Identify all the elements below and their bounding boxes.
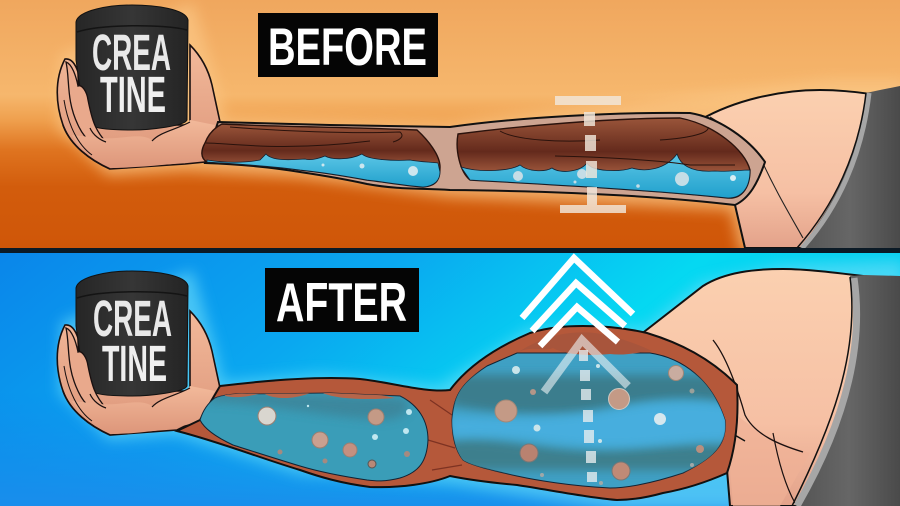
up arrow chevrons bbox=[522, 258, 633, 392]
label: before: BEFORE bbox=[268, 18, 427, 77]
jar: TINE bbox=[100, 66, 166, 123]
before tank top bbox=[797, 86, 900, 248]
before shoulder bbox=[700, 90, 880, 248]
before background bbox=[0, 0, 900, 250]
fingers over jar bbox=[66, 62, 106, 144]
after upper arm muscle bbox=[450, 332, 730, 488]
after hand and jar bbox=[57, 271, 220, 435]
label: after: AFTER bbox=[276, 271, 407, 333]
after arm glow bbox=[63, 265, 900, 506]
jar label: CREA bbox=[93, 290, 172, 347]
jar: TINE bbox=[102, 335, 167, 392]
after shoulder bbox=[640, 269, 880, 506]
panel: before bbox=[0, 0, 900, 250]
panel: after bbox=[0, 253, 900, 506]
hand bbox=[57, 45, 220, 169]
growth dashes bbox=[579, 350, 597, 482]
after forearm muscle bbox=[200, 384, 428, 481]
jar bbox=[76, 5, 188, 130]
before arm bbox=[202, 113, 765, 205]
after tank top bbox=[792, 275, 900, 506]
after arm bbox=[177, 326, 738, 500]
jar label: CREA bbox=[92, 24, 171, 81]
before forearm muscle bbox=[202, 124, 440, 187]
before hand and jar bbox=[57, 5, 220, 169]
divider bbox=[0, 248, 900, 253]
jar bbox=[76, 271, 188, 396]
before upper arm muscle bbox=[457, 118, 750, 198]
after background bbox=[0, 253, 900, 506]
width marker bbox=[555, 96, 626, 213]
label: before bbox=[258, 13, 438, 77]
before arm glow bbox=[63, 10, 900, 248]
